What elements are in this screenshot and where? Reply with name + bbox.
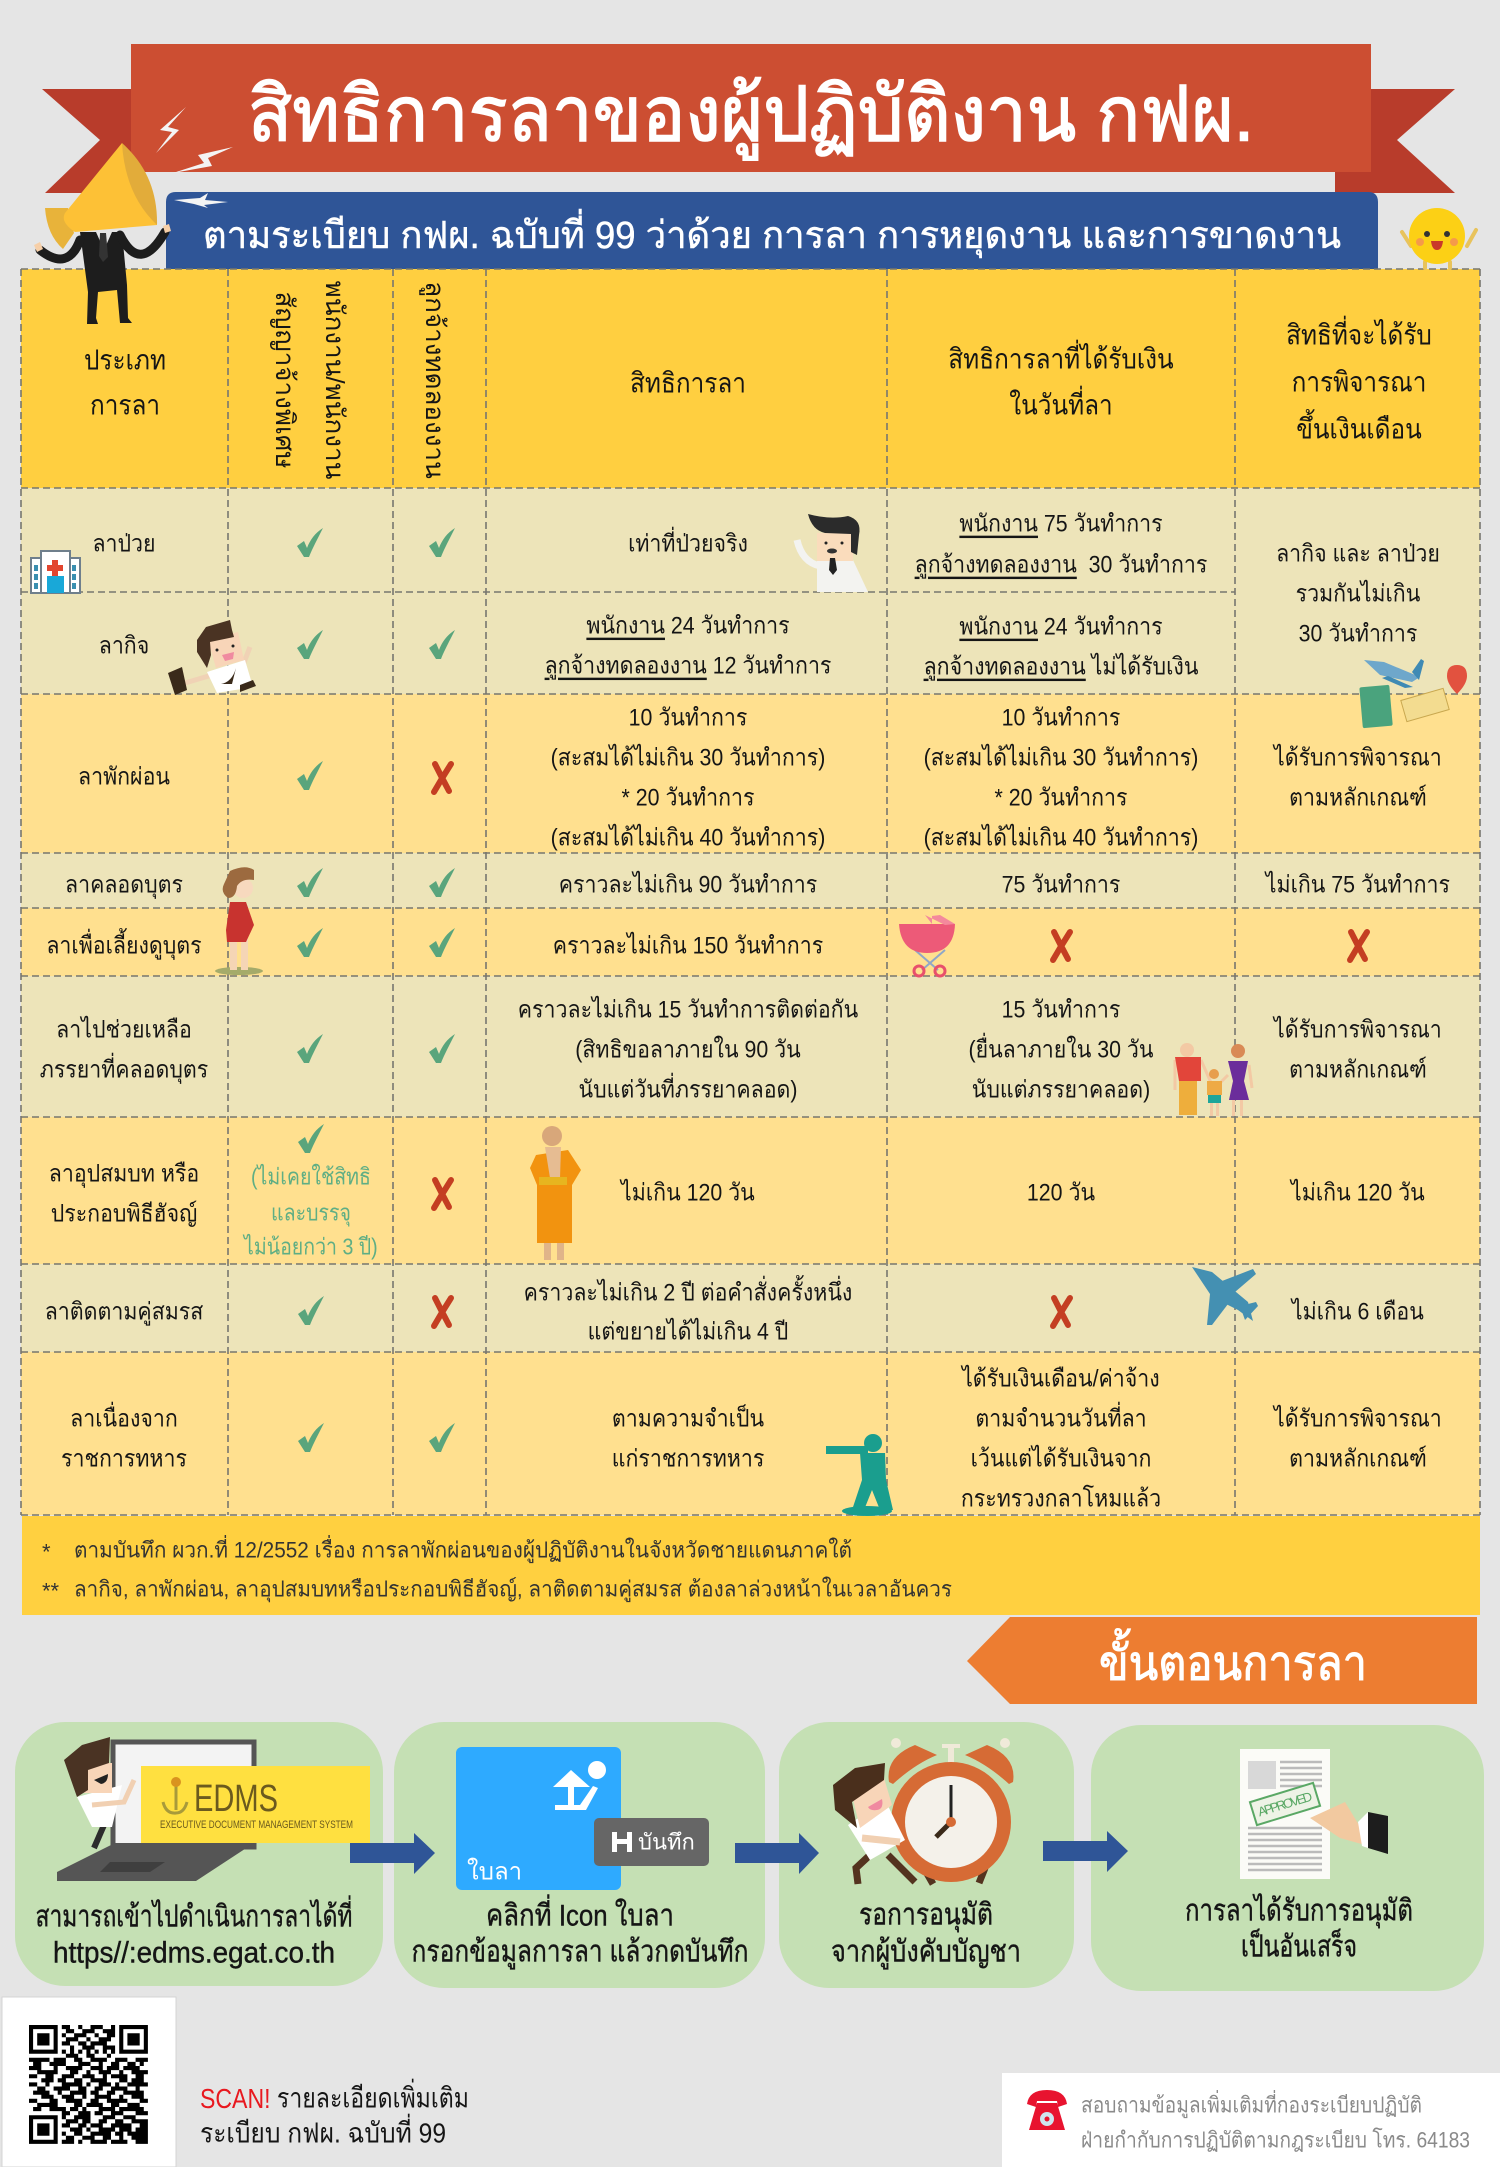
row: personal leave: ลูกจ้างทดลองงาน ไม่ได้รับเงิน xyxy=(924,652,1198,681)
section tag: procedure xyxy=(967,1617,1477,1704)
footnotes: * xyxy=(42,1540,51,1564)
row: personal leave: ลากิจ xyxy=(99,631,149,659)
header labels: สิทธิการลาที่ได้รับเงิน xyxy=(948,340,1174,375)
EDMS logo: EXECUTIVE DOCUMENT MANAGEMENT SYSTEM xyxy=(160,1819,353,1831)
icon: soldier xyxy=(826,1434,893,1516)
row: paternity: ลาไปช่วยเหลือ xyxy=(56,1015,192,1043)
row: maternity: ลาคลอดบุตร xyxy=(65,870,183,899)
row: vacation: (สะสมได้ไม่เกิน 30 วันทำการ) xyxy=(551,743,825,771)
icon: running man xyxy=(168,620,256,695)
step 3 card: รอการอนุมัติ xyxy=(859,1898,993,1934)
step 3 card: จากผู้บังคับบัญชา xyxy=(831,1936,1021,1970)
header labels: ขึ้นเงินเดือน xyxy=(1296,409,1422,445)
ribbon tails xyxy=(42,89,1455,193)
save button xyxy=(594,1818,709,1866)
leave app tile xyxy=(456,1747,621,1890)
row: military: แก่ราชการทหาร xyxy=(612,1444,764,1472)
icon: telephone xyxy=(1027,2090,1067,2130)
arrow: step 1 to 2 xyxy=(350,1833,435,1874)
icon: megaphone man xyxy=(34,143,171,324)
row backgrounds xyxy=(21,488,1480,1515)
step 2 card: คลิกที่ Icon ใบลา xyxy=(486,1894,674,1932)
icon: lightning bolts xyxy=(156,107,233,208)
subtitle banner xyxy=(166,192,1378,269)
icon: hospital xyxy=(31,551,80,593)
row: vacation: * 20 วันทำการ xyxy=(622,783,754,811)
row: vacation: ได้รับการพิจารณา xyxy=(1272,743,1442,771)
row: vacation: ตามหลักเกณฑ์ xyxy=(1289,783,1427,811)
row: ordination: (ไม่เคยใช้สิทธิ xyxy=(251,1163,371,1190)
row: sick leave: ลาป่วย xyxy=(92,529,156,557)
row: paternity: 15 วันทำการ xyxy=(1002,995,1120,1023)
header row background xyxy=(21,269,1480,488)
row: paternity: (ยื่นลาภายใน 30 วัน xyxy=(968,1032,1154,1063)
arrow: step 2 to 3 xyxy=(735,1833,819,1874)
header labels: สัญญาจ้างพิเศษ xyxy=(270,292,300,468)
row: vacation: (สะสมได้ไม่เกิน 40 วันทำการ) xyxy=(551,823,825,851)
merged salary cell xyxy=(1276,539,1440,647)
icon: approved document: APPROVED xyxy=(1256,1789,1314,1819)
row: childcare: คราวละไม่เกิน 150 วันทำการ xyxy=(553,931,823,959)
save button: บันทึก xyxy=(638,1830,695,1854)
row: sick leave: พนักงาน 75 วันทำการ xyxy=(959,509,1163,537)
footnotes: ลากิจ, ลาพักผ่อน, ลาอุปสมบทหรือประกอบพิธีฮัจญ์, ลาติดตามคู่สมรส ต้องลาล่วงหน้าในเวลาอันควร xyxy=(74,1576,952,1602)
icon: airplane xyxy=(1192,1267,1258,1325)
row: ordination: 120 วัน xyxy=(1027,1178,1095,1206)
icon: travel items xyxy=(1359,659,1467,728)
footnotes: ** xyxy=(42,1578,60,1604)
contact panel xyxy=(1002,2073,1500,2167)
row: maternity: 75 วันทำการ xyxy=(1002,870,1120,898)
row: paternity: นับแต่วันที่ภรรยาคลอด) xyxy=(578,1072,798,1103)
arrow: step 3 to 4 xyxy=(1043,1831,1128,1872)
QR code xyxy=(29,2025,148,2144)
scan text: ระเบียบ กฟผ. ฉบับที่ 99 xyxy=(200,2114,446,2148)
step 2 card xyxy=(394,1722,765,1988)
header labels: สิทธิการลา xyxy=(630,367,746,399)
step 3 card xyxy=(779,1722,1074,1988)
row: military: ได้รับเงินเดือน/ค่าจ้าง xyxy=(960,1364,1160,1392)
row: vacation xyxy=(78,703,1442,851)
row: paternity: คราวละไม่เกิน 15 วันทำการติดต่อกัน xyxy=(518,995,858,1023)
row: sick leave: เท่าที่ป่วยจริง xyxy=(628,526,748,557)
row: childcare: ลาเพื่อเลี้ยงดูบุตร xyxy=(46,928,202,960)
icon: alarm clock with man xyxy=(833,1738,1013,1884)
row: paternity: ตามหลักเกณฑ์ xyxy=(1289,1055,1427,1083)
step 4 card: เป็นอันเสร็จ xyxy=(1241,1928,1357,1964)
row: ordination: และบรรจุ xyxy=(271,1200,351,1227)
row: personal leave: พนักงาน 24 วันทำการ xyxy=(586,611,790,639)
icon: smiley xyxy=(1402,208,1476,268)
row: ordination: ลาอุปสมบท หรือ xyxy=(49,1159,199,1188)
row: military: ลาเนื่องจาก xyxy=(70,1401,178,1432)
row: military: ราชการทหาร xyxy=(61,1444,187,1472)
row: ordination: ประกอบพิธีฮัจญ์ xyxy=(51,1199,197,1227)
step 1 card: สามารถเข้าไปดำเนินการลาได้ที่ xyxy=(36,1896,352,1934)
section tag: procedure: ขั้นตอนการลา xyxy=(1099,1628,1367,1690)
EDMS logo xyxy=(141,1766,370,1843)
row: accompany spouse: แต่ขยายได้ไม่เกิน 4 ปี xyxy=(588,1317,788,1345)
row: accompany spouse: ไม่เกิน 6 เดือน xyxy=(1290,1297,1424,1325)
scan text: SCAN! รายละเอียดเพิ่มเติม xyxy=(200,2078,469,2114)
icon: doctor xyxy=(797,514,868,592)
row: accompany spouse: ลาติดตามคู่สมรส xyxy=(45,1297,203,1326)
row: military: ได้รับการพิจารณา xyxy=(1272,1404,1442,1432)
row: vacation: (สะสมได้ไม่เกิน 30 วันทำการ) xyxy=(924,743,1198,771)
title banner xyxy=(131,44,1371,172)
row: ordination: ไม่เกิน 120 วัน xyxy=(1289,1178,1425,1206)
row: military: ตามหลักเกณฑ์ xyxy=(1289,1444,1427,1472)
icon: approved document xyxy=(1240,1749,1388,1879)
header labels: ลูกจ้างทดลองงาน xyxy=(419,281,450,479)
merged salary cell: รวมกันไม่เกิน xyxy=(1296,579,1420,607)
row: vacation: (สะสมได้ไม่เกิน 40 วันทำการ) xyxy=(924,823,1198,851)
row: military: ตามความจำเป็น xyxy=(612,1402,764,1432)
row: ordination: ไม่น้อยกว่า 3 ปี) xyxy=(242,1233,378,1260)
row: military: ตามจำนวนวันที่ลา xyxy=(975,1401,1147,1432)
icon: laptop with man xyxy=(57,1737,254,1881)
QR panel xyxy=(2,1997,176,2167)
step 2 card: กรอกข้อมูลการลา แล้วกดบันทึก xyxy=(412,1936,748,1970)
row: ordination: ไม่เกิน 120 วัน xyxy=(619,1178,755,1206)
header labels: พนักงาน/พนักงาน xyxy=(320,281,350,480)
header labels: การลา xyxy=(90,389,160,421)
row: accompany spouse xyxy=(45,1275,1424,1345)
footnotes: ตามบันทึก ผวก.ที่ 12/2552 เรื่อง การลาพักผ่อนของผู้ปฏิบัติงานในจังหวัดชายแดนภาคใต้ xyxy=(74,1534,852,1564)
row: vacation: 10 วันทำการ xyxy=(629,703,747,731)
title banner: สิทธิการลาของผู้ปฏิบัติงาน กฟผ. xyxy=(248,72,1254,160)
row: personal leave: ลูกจ้างทดลองงาน 12 วันทำการ xyxy=(545,651,831,680)
row: personal leave: พนักงาน 24 วันทำการ xyxy=(959,612,1163,640)
row: maternity xyxy=(65,868,1450,899)
row: military xyxy=(61,1364,1442,1512)
row: vacation: 10 วันทำการ xyxy=(1002,703,1120,731)
row: accompany spouse: คราวละไม่เกิน 2 ปี ต่อคำสั่งครั้งหนึ่ง xyxy=(524,1275,852,1306)
row: childcare xyxy=(46,928,1367,960)
row: maternity: ไม่เกิน 75 วันทำการ xyxy=(1264,870,1450,898)
leave table xyxy=(21,269,1480,1515)
row: sick leave: ลูกจ้างทดลองงาน 30 วันทำการ xyxy=(915,550,1207,579)
row: military: เว้นแต่ได้รับเงินจาก xyxy=(971,1444,1151,1472)
row: paternity: นับแต่ภรรยาคลอด) xyxy=(972,1075,1150,1103)
row: personal leave xyxy=(99,611,1198,681)
icon: stroller xyxy=(899,915,955,976)
leave app tile: ใบลา xyxy=(467,1858,522,1886)
header labels: สิทธิที่จะได้รับ xyxy=(1286,316,1432,351)
icon: monk xyxy=(530,1126,581,1260)
row: ordination xyxy=(49,1124,1425,1260)
step 1 card xyxy=(15,1722,383,1986)
header labels: การพิจารณา xyxy=(1292,366,1426,398)
footnotes xyxy=(22,1516,1480,1615)
EDMS logo: EDMS xyxy=(194,1778,278,1820)
row: paternity xyxy=(40,995,1442,1103)
merged salary cell: 30 วันทำการ xyxy=(1299,619,1417,647)
subtitle banner: ตามระเบียบ กฟผ. ฉบับที่ 99 ว่าด้วย การลา การหยุดงาน และการขาดงาน xyxy=(203,209,1341,258)
contact panel: สอบถามข้อมูลเพิ่มเติมที่กองระเบียบปฏิบัติ xyxy=(1081,2090,1422,2118)
row: maternity: คราวละไม่เกิน 90 วันทำการ xyxy=(559,870,817,898)
row: vacation: * 20 วันทำการ xyxy=(995,783,1127,811)
step 4 card: การลาได้รับการอนุมัติ xyxy=(1185,1892,1413,1930)
merged salary cell: ลากิจ และ ลาป่วย xyxy=(1276,539,1440,567)
row: vacation: ลาพักผ่อน xyxy=(78,762,170,790)
header labels: ประเภท xyxy=(84,344,166,376)
step 4 card xyxy=(1091,1725,1484,1991)
row: military: กระทรวงกลาโหมแล้ว xyxy=(961,1484,1161,1512)
row: sick leave xyxy=(92,509,1207,579)
row: paternity: ภรรยาที่คลอดบุตร xyxy=(40,1052,208,1084)
step 1 card: https//:edms.egat.co.th xyxy=(53,1936,335,1970)
icon: pregnant woman xyxy=(215,867,263,975)
scan text xyxy=(200,2078,469,2148)
header labels xyxy=(84,281,1432,480)
row: paternity: (สิทธิขอลาภายใน 90 วัน xyxy=(575,1035,801,1063)
header labels: ในวันที่ลา xyxy=(1009,386,1113,421)
icon: family xyxy=(1175,1043,1252,1116)
row: paternity: ได้รับการพิจารณา xyxy=(1272,1015,1442,1043)
